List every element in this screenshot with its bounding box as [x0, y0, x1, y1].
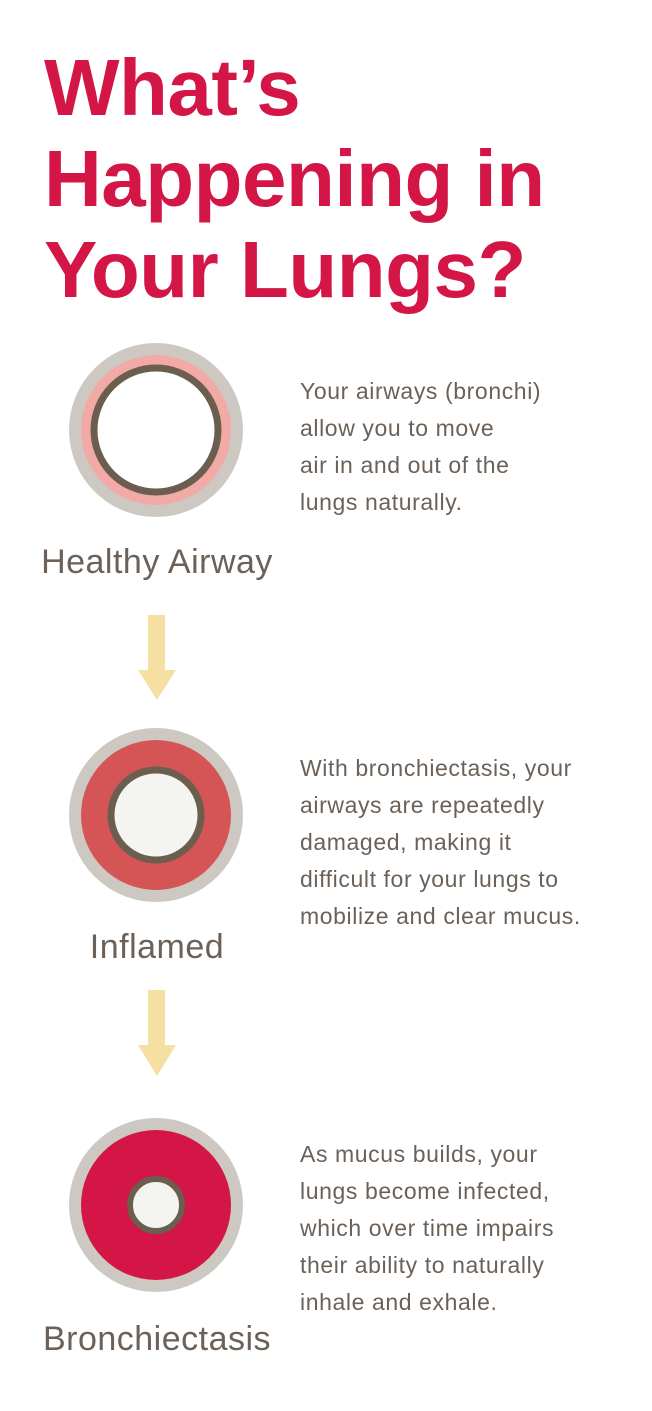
title [44, 43, 545, 314]
text: healthy [300, 378, 541, 515]
text: inflamed: damaged, making it [300, 829, 512, 855]
text: inflamed: mobilize and clear mucus. [300, 903, 581, 929]
text: healthy: air in and out of the [300, 452, 510, 478]
title: Your Lungs? [44, 225, 526, 314]
text: bronchiectasis: which over time impairs [300, 1215, 554, 1241]
text: bronchiectasis [300, 1141, 554, 1315]
text: healthy: Your airways (bronchi) [300, 378, 541, 404]
text: inflamed: difficult for your lungs to [300, 866, 559, 892]
arrow 2 [138, 990, 176, 1076]
icon: inflamed airway [69, 728, 243, 902]
icon: bronchiectasis airway [69, 1118, 243, 1292]
icon: healthy airway [69, 343, 243, 517]
label: bronchiectasis: Bronchiectasis [43, 1320, 271, 1358]
label: inflamed: Inflamed [90, 928, 224, 966]
text: bronchiectasis: their ability to naturally [300, 1252, 544, 1278]
text: bronchiectasis: As mucus builds, your [300, 1141, 538, 1167]
text: healthy: allow you to move [300, 415, 494, 441]
text: inflamed: airways are repeatedly [300, 792, 545, 818]
text: inflamed: With bronchiectasis, your [300, 755, 572, 781]
text: bronchiectasis: inhale and exhale. [300, 1289, 498, 1315]
label: healthy airway: Healthy Airway [41, 543, 273, 581]
text: healthy: lungs naturally. [300, 489, 463, 515]
title: What’s [44, 43, 300, 132]
text: inflamed [300, 755, 581, 929]
title: Happening in [44, 134, 545, 223]
text: bronchiectasis: lungs become infected, [300, 1178, 550, 1204]
arrow 1 [138, 615, 176, 700]
